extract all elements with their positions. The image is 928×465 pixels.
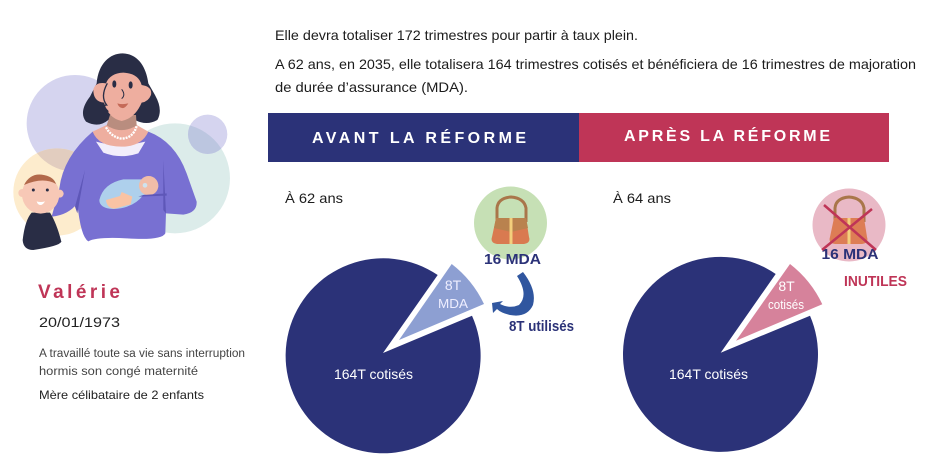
icon: handbag, 16 MDA: 16 MDA (484, 251, 541, 268)
label: à 62 ans: À 62 ans (285, 190, 343, 206)
header: avant la réforme: AVANT LA RÉFORME (312, 128, 526, 147)
label: 8T utilisés: 8T utilisés (509, 319, 574, 335)
text block: introduction: Elle devra totaliser 172 trimestres pour partir à taux plein. (275, 27, 638, 43)
icon: handbag, 16 MDA (474, 186, 547, 268)
icon: crossed-out handbag, 16 MDA: 16 MDA (822, 246, 879, 263)
pie chart: avant la réforme: MDA (438, 296, 468, 311)
header: avant la réforme (268, 113, 579, 162)
pie chart: après la réforme: cotisés (768, 298, 804, 312)
header: après la réforme (579, 113, 889, 162)
label: inutiles: INUTILES (844, 273, 907, 290)
icon: crossed-out handbag, 16 MDA (812, 188, 886, 263)
illustration: Valérie and her children (13, 53, 230, 250)
pie chart: après la réforme: 8T (778, 278, 795, 294)
pie chart: après la réforme: 164T cotisés (669, 366, 748, 382)
header: après la réforme: APRÈS LA RÉFORME (624, 126, 830, 145)
text block: career description: hormis son congé maternité (39, 366, 198, 378)
pie chart: avant la réforme: 8T (445, 277, 462, 293)
pie chart: avant la réforme: 164T cotisés (334, 366, 413, 382)
pie chart: après la réforme (623, 257, 822, 452)
label: à 64 ans: À 64 ans (613, 190, 671, 206)
text: family situation: Mère célibataire de 2 enfants (39, 388, 204, 402)
text block: introduction: A 62 ans, en 2035, elle totalisera 164 trimestres cotisés et bénéficiera de 16 trimestres de majoration (275, 56, 916, 72)
text block: introduction (275, 27, 916, 95)
text block: introduction: de durée d’assurance (MDA). (275, 79, 468, 95)
text block: career description: A travaillé toute sa vie sans interruption (39, 348, 245, 360)
arrow: 8T utilisés (492, 272, 534, 316)
text block: career description (39, 348, 245, 378)
pie chart: avant la réforme (286, 258, 484, 453)
heading: Valérie name: Valérie (38, 282, 120, 303)
text: birth date: 20/01/1973 (39, 315, 120, 330)
